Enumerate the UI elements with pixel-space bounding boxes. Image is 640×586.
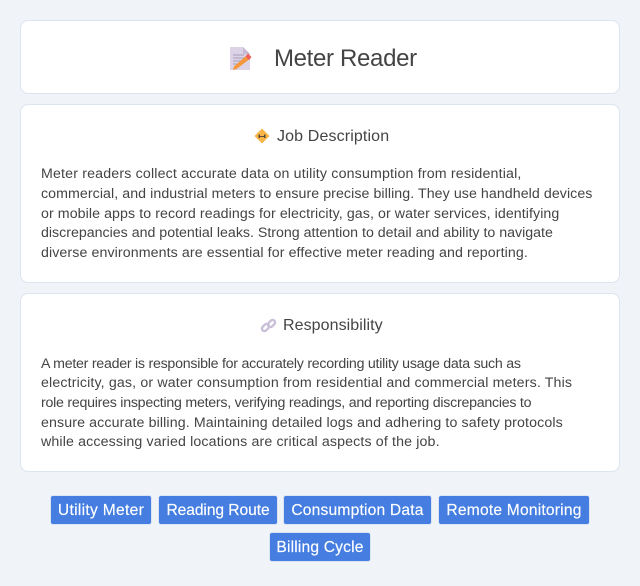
text block: responsibility	[41, 356, 572, 450]
tag: utility meter: Utility Meter	[58, 502, 144, 519]
heading: job description: Job Description	[277, 128, 389, 145]
icon: chain link	[260, 318, 276, 332]
text block: responsibility: A meter reader is responsible for accurately recording utility usage data such as	[41, 356, 521, 372]
text block: job description: Meter readers collect accurate data on utility consumption from residential,	[41, 166, 522, 182]
text block: responsibility: role requires inspecting meters, verifying readings, and reporting discrepancies to	[41, 395, 531, 411]
tag: consumption data: Consumption Data	[291, 502, 424, 519]
text block: job description: or mobile apps to record readings for electricity, gas, or water services, identifying	[41, 206, 559, 222]
tag: billing cycle	[269, 532, 371, 562]
panel: title card	[20, 20, 620, 94]
title: Meter Reader	[274, 45, 417, 72]
tag: billing cycle: Billing Cycle	[276, 539, 364, 556]
tag: remote monitoring: Remote Monitoring	[446, 502, 582, 519]
text block: job description: commercial, and industrial meters to ensure precise billing. They use handheld devices	[41, 186, 592, 202]
text block: job description	[41, 166, 592, 261]
tag: utility meter	[50, 495, 152, 525]
text block: responsibility: ensure accurate billing. Maintaining detailed logs and adhering to safety protocols	[41, 415, 563, 431]
text block: job description: diverse environments are essential for effective meter reading and reporting.	[41, 245, 528, 261]
icon: document with pencil	[230, 47, 252, 70]
panel: job description	[20, 104, 620, 283]
text block: responsibility: while accessing varied locations are critical aspects of the job.	[41, 434, 440, 450]
tag: reading route	[158, 495, 278, 525]
panel: responsibility	[20, 293, 620, 472]
text block: responsibility: electricity, gas, or water consumption from residential and commercial meters. This	[41, 375, 572, 391]
icon: construction diamond	[254, 128, 270, 144]
tag: remote monitoring	[438, 495, 590, 525]
tag: reading route: Reading Route	[166, 502, 270, 519]
text block: job description: discrepancies and potential leaks. Strong attention to detail and ability to navigate	[41, 225, 553, 241]
tag: consumption data	[283, 495, 432, 525]
heading: responsibility: Responsibility	[283, 317, 383, 334]
